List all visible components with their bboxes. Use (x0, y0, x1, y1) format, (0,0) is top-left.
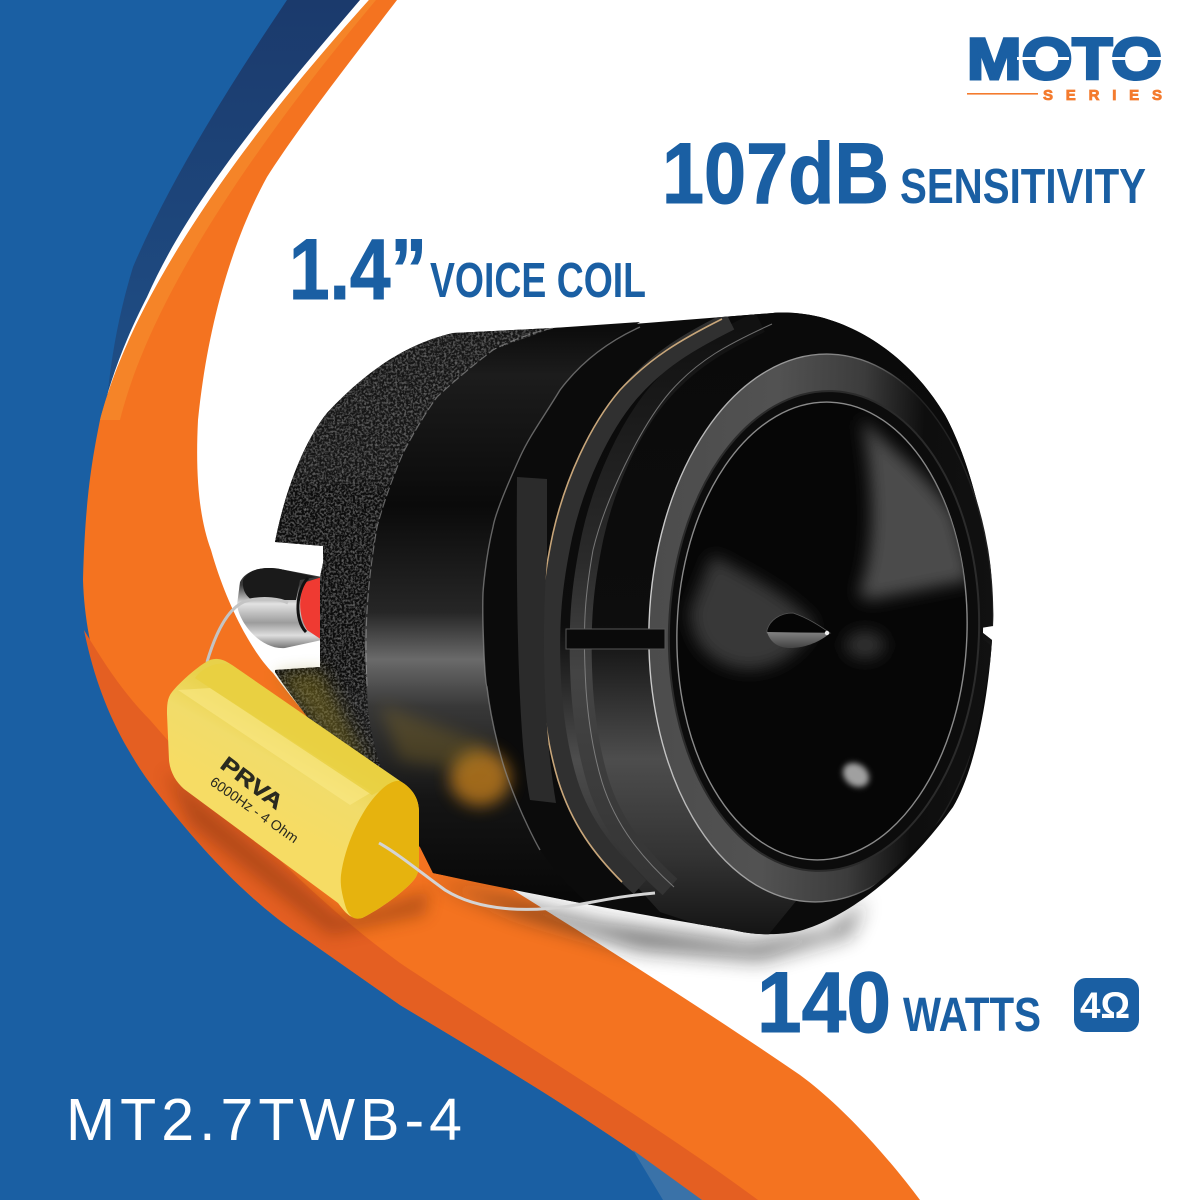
light orange edge (100, 0, 376, 420)
thin band line (584, 324, 772, 887)
spec: voice coil: 1.4” (289, 222, 427, 318)
capacitor lead bottom (379, 843, 655, 909)
front housing group (541, 300, 1010, 945)
notch marker (566, 629, 665, 649)
capacitor highlight (178, 688, 372, 805)
capacitor lead top (207, 599, 288, 662)
background swooshes (0, 0, 920, 1200)
capacitor end cap (341, 781, 419, 919)
speaker shadow (165, 770, 865, 960)
gasket ring (661, 386, 987, 876)
capacitor shadow on orange (165, 770, 430, 935)
right faint reflection (845, 631, 885, 659)
yellow reflection streak (380, 705, 490, 770)
spec: watts (757, 955, 1041, 1051)
logo slit second O (1111, 57, 1165, 60)
orange swoosh (83, 0, 920, 1200)
logo orange rule (967, 93, 1038, 95)
capacitor (167, 599, 655, 919)
logo: Moto Series: MOTO (967, 27, 1162, 92)
phase plug tip (825, 631, 829, 635)
middle housing band (365, 322, 640, 905)
seam highlight (366, 328, 553, 687)
logo slit first O (1017, 57, 1069, 60)
textured rear cap (275, 328, 553, 860)
horn reflections (690, 418, 972, 792)
blue left field (0, 0, 750, 1200)
terminal dark collar (243, 568, 316, 600)
horn opening (669, 397, 975, 865)
front ring outer chamfer (640, 348, 1002, 908)
capacitor orange reflection (450, 750, 510, 806)
copper gasket line (541, 319, 722, 882)
capacitor value: 6000Hz - 4 Ohm (207, 773, 302, 846)
model number: MT2.7TWB-4 (66, 1087, 462, 1153)
terminal red band (300, 577, 322, 640)
upper right reflection (858, 418, 972, 600)
spec: voice coil (289, 222, 646, 318)
front chamfer housing (551, 300, 1010, 945)
driver silhouette (275, 312, 993, 934)
tweeter driver (275, 300, 1010, 945)
impedance text: 4Ω (1080, 985, 1130, 1026)
light blue sliver (633, 1150, 702, 1200)
navy swoosh band (0, 0, 360, 420)
spec: sensitivity (662, 126, 1146, 222)
capacitor upper band (195, 663, 400, 795)
capacitor label: PRVA (216, 753, 287, 814)
terminal black ring (298, 578, 308, 632)
spec: watts: 140 (757, 955, 891, 1051)
foam gasket (551, 321, 730, 887)
sensitivity label: SENSITIVITY (900, 160, 1146, 214)
capacitor reflection on rear (276, 670, 370, 770)
capacitor body (167, 659, 419, 918)
housing highlight line (483, 327, 640, 850)
phase plug bullet (767, 613, 830, 648)
logo series text: SERIES (1043, 87, 1162, 104)
grey mounting tab (517, 477, 556, 803)
watts label: WATTS (903, 989, 1041, 1042)
lower spot reflection (839, 759, 873, 791)
dark orange band (84, 630, 758, 1200)
impedance badge (1074, 978, 1139, 1032)
left reflection (690, 555, 815, 669)
phase plug lower highlight (767, 632, 830, 648)
spec: sensitivity: 107dB (662, 126, 889, 222)
voice coil label: VOICE COIL (430, 254, 646, 308)
grey inner band (581, 322, 760, 887)
terminal post (237, 568, 322, 648)
